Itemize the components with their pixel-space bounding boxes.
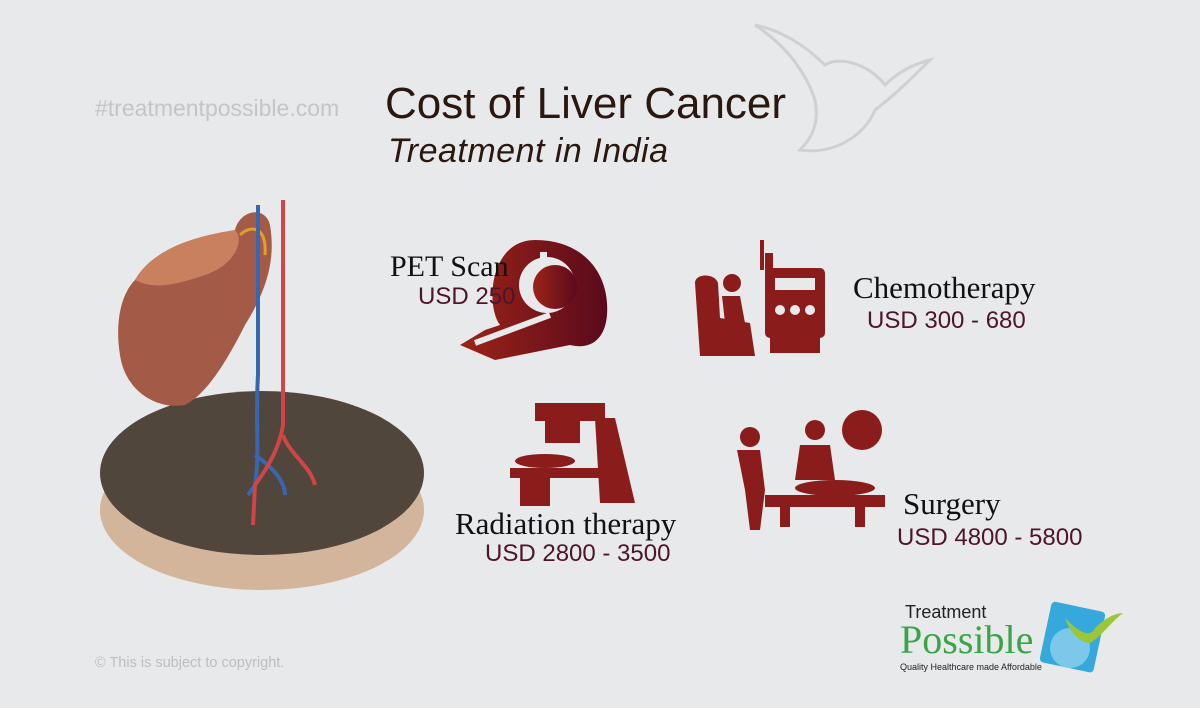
surgery cost: USD 4800 - 5800 (897, 524, 1082, 551)
logo (900, 602, 1123, 672)
title: Cost of Liver Cancer (385, 79, 786, 128)
radiation cost: USD 2800 - 3500 (485, 540, 670, 567)
logo: Quality Healthcare made Affordable (900, 662, 1042, 672)
logo: Possible (900, 617, 1033, 662)
PET scan label: PET Scan (390, 250, 509, 283)
liver illustration on platform (100, 200, 424, 590)
chemotherapy icon (695, 240, 825, 356)
chemotherapy cost: USD 300 - 680 (867, 307, 1026, 334)
PET scan cost: USD 250 (418, 283, 515, 310)
watermark bird (754, 24, 934, 152)
watermark url: #treatmentpossible.com (95, 95, 339, 121)
subtitle: Treatment in India (388, 132, 669, 170)
logo: Treatment (905, 602, 986, 622)
surgery icon (737, 410, 885, 530)
radiation therapy icon (510, 403, 635, 506)
copyright: © This is subject to copyright. (95, 655, 284, 671)
surgery label: Surgery (903, 486, 1001, 521)
radiation label: Radiation therapy (455, 506, 676, 541)
chemotherapy label: Chemotherapy (853, 270, 1036, 305)
PET scan icon (460, 240, 608, 360)
